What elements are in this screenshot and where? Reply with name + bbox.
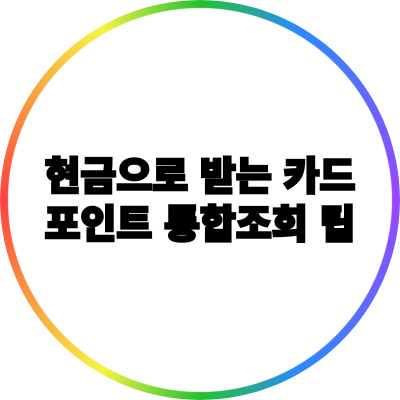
- title line 2: 포인트 통합조회 팁: [45, 204, 355, 247]
- title line 1: 현금으로 받는 카드: [45, 156, 355, 199]
